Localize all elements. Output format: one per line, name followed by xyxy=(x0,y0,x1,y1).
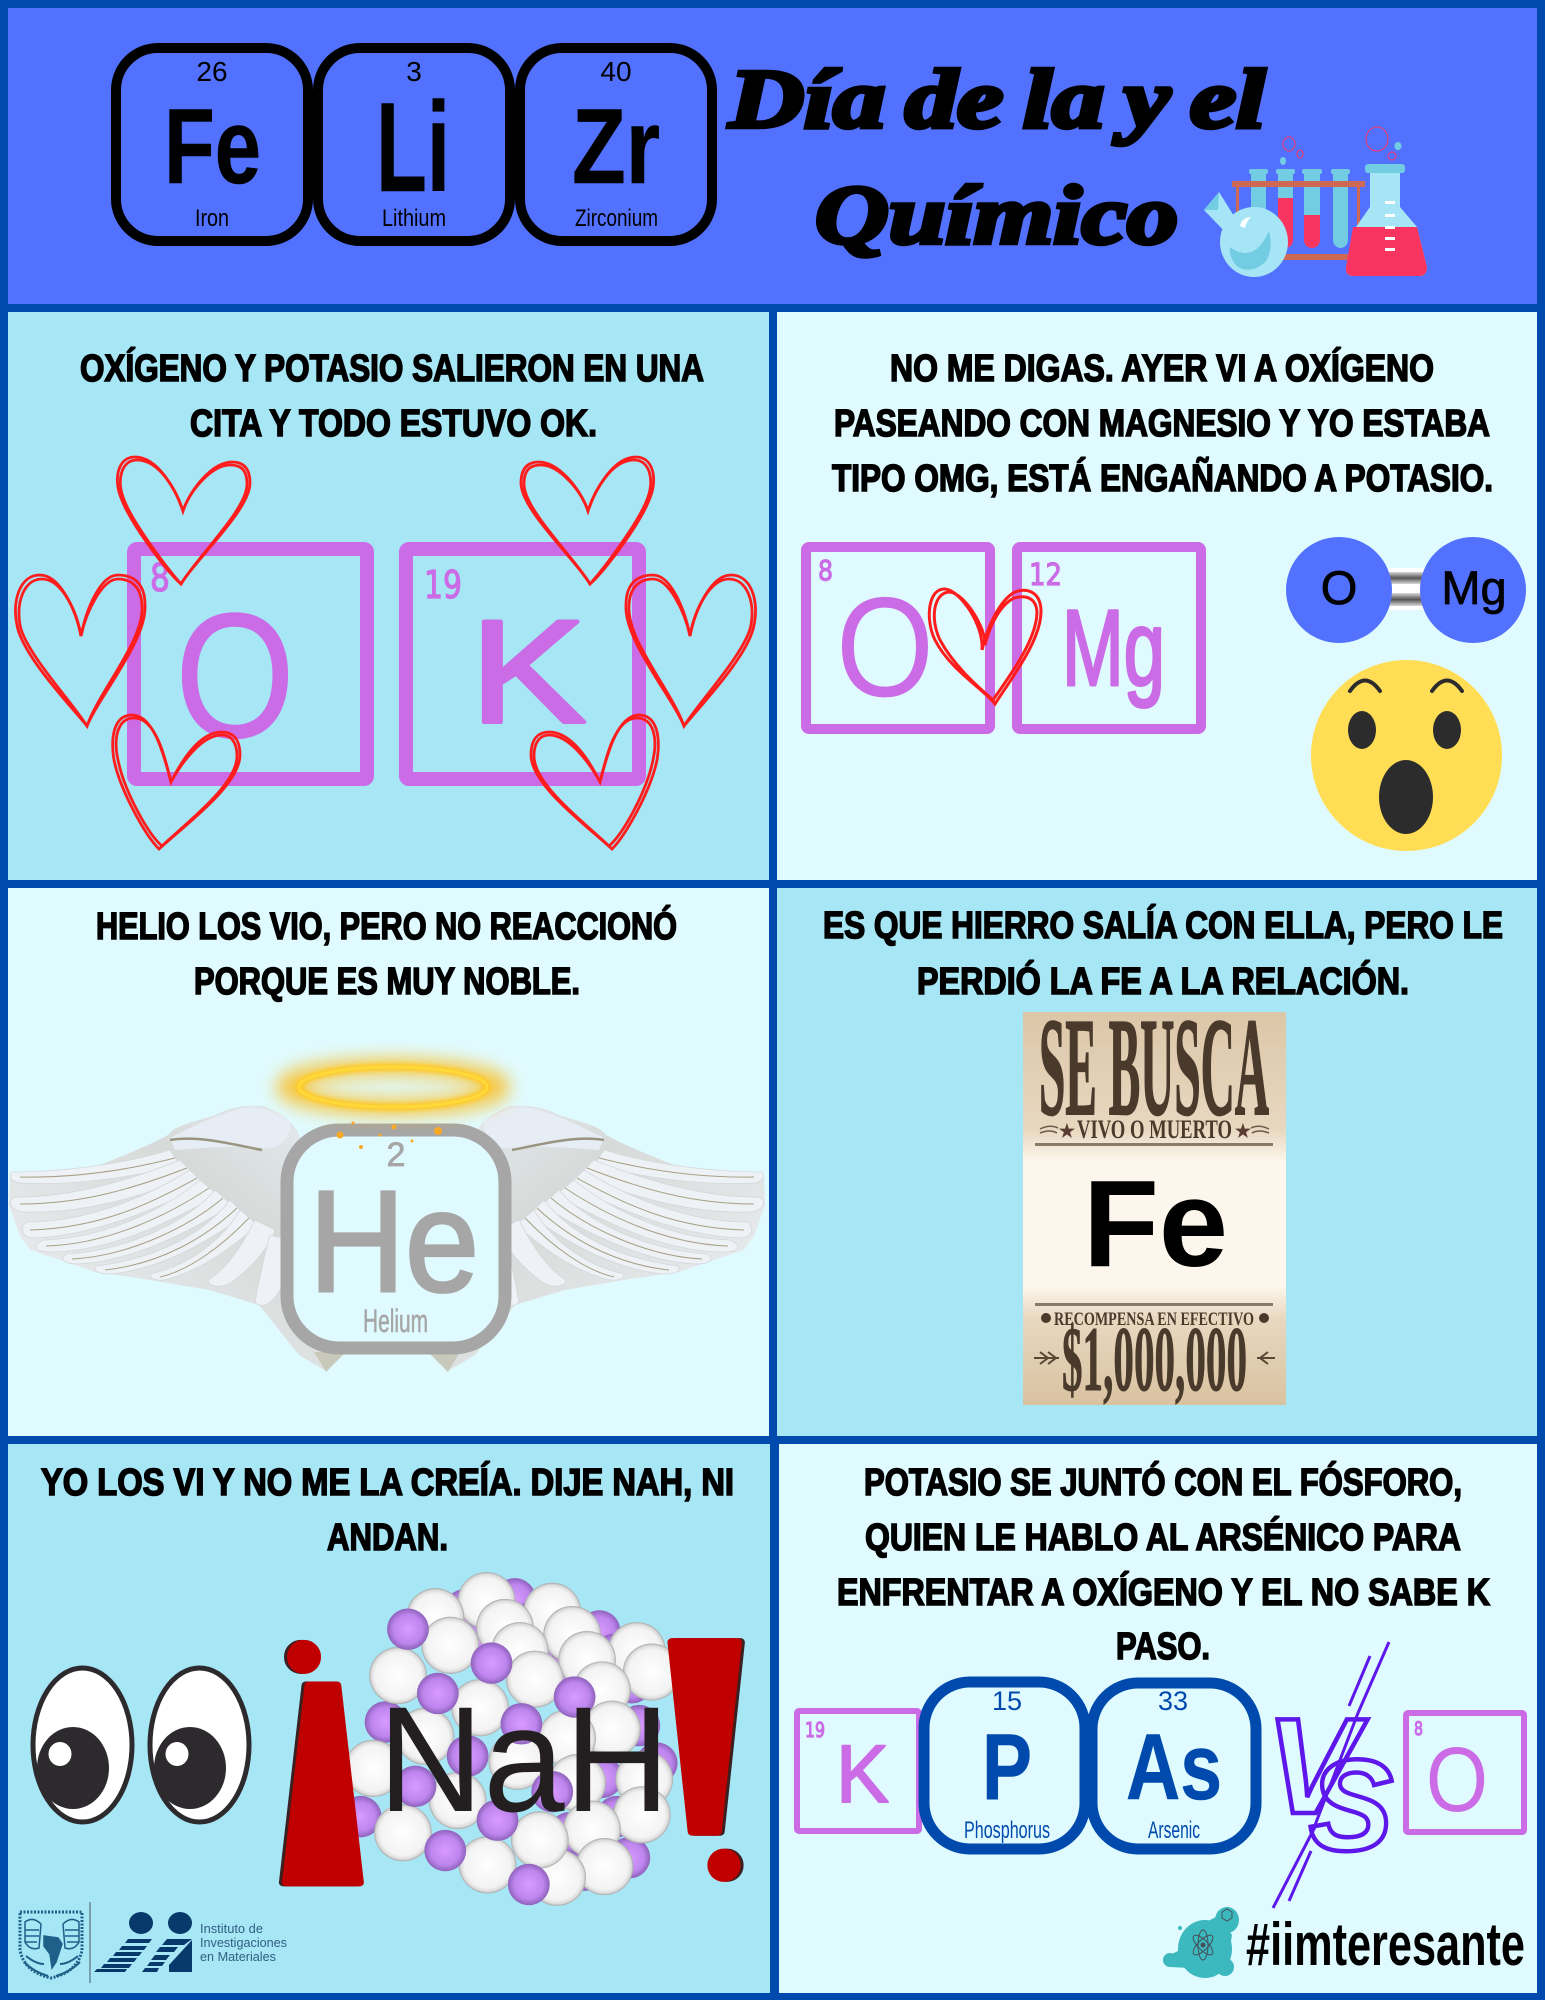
logo: UNAM shield xyxy=(20,1912,82,1978)
big word: ¡NaH! xyxy=(278,1638,745,1886)
element tile: Fe xyxy=(116,48,308,241)
icon: O-Mg molecule: Mg xyxy=(1441,561,1507,614)
element tile: P: Phosphorus xyxy=(964,1817,1050,1844)
icon: golden halo xyxy=(285,1067,501,1149)
element tile: Li: 3 xyxy=(406,56,422,87)
hearts: right group xyxy=(521,457,755,849)
wanted poster xyxy=(1023,990,1286,1410)
heading text: PASO. xyxy=(1116,1626,1210,1668)
title: Día de la y el xyxy=(728,53,1266,146)
element tile: He: He xyxy=(309,1161,479,1322)
element tile: O: 8 xyxy=(818,554,833,587)
element tile: K: K xyxy=(836,1729,889,1820)
element tile: Mg: 12 xyxy=(1029,558,1062,593)
versus mark: S xyxy=(1309,1732,1393,1878)
element tile: As: As xyxy=(1126,1714,1222,1819)
wanted poster: ★ xyxy=(1059,1121,1076,1141)
icon: surprised emoji xyxy=(1311,660,1502,851)
big word: ¡NaH!: ! xyxy=(630,1544,780,2000)
title: Químico xyxy=(815,169,1178,262)
heading text: NO ME DIGAS. AYER VI A OXÍGENO xyxy=(890,346,1434,390)
hearts: left group xyxy=(16,457,250,849)
panel: iron wanted xyxy=(777,888,1537,1436)
element tile: Mg: Mg xyxy=(1062,587,1165,708)
title xyxy=(728,53,1266,262)
big word: ¡NaH!: . xyxy=(701,1697,753,1924)
element tile: As: 33 xyxy=(1158,1686,1188,1716)
big word: ¡NaH!: NaH xyxy=(378,1675,670,1843)
icon: teal atom blob xyxy=(1163,1907,1239,1978)
heading text xyxy=(41,1460,734,1559)
element tile: O: O xyxy=(836,568,934,727)
element tile: O: 8 xyxy=(150,556,170,600)
icon: heart between tiles xyxy=(929,589,1041,704)
icon: angel wings left xyxy=(9,1106,346,1372)
element tile: K: 19 xyxy=(805,1718,825,1742)
logo: IIM institute: en Materiales xyxy=(200,1949,276,1964)
icon: O-Mg molecule xyxy=(1286,537,1526,643)
heading text xyxy=(832,346,1493,500)
element tile: Li: Li xyxy=(376,76,450,218)
big word: ¡NaH!: ! xyxy=(633,1544,783,2000)
logo: IIM institute: Instituto de xyxy=(200,1921,263,1936)
panel: potassium, phosphorus, arsenic vs oxygen xyxy=(779,1444,1537,1993)
versus mark xyxy=(1266,1642,1393,1908)
panel: oxygen and potassium date xyxy=(8,312,769,880)
element tile: He xyxy=(287,1130,505,1348)
element tile: He: 2 xyxy=(387,1136,405,1174)
icon: NaH crystal spheres xyxy=(340,1572,697,1906)
element tile: Fe: 26 xyxy=(196,56,228,87)
icon: cartoon eyes xyxy=(33,1668,249,1822)
big word: ¡NaH!: . xyxy=(278,1485,330,1717)
element tile: As: Arsenic xyxy=(1148,1817,1200,1844)
versus mark: V xyxy=(1266,1690,1368,1842)
element tile: Zr: Zirconium xyxy=(575,205,658,232)
wanted poster: ★ xyxy=(1235,1121,1252,1141)
panel: helium noble xyxy=(8,888,769,1436)
element tile: O xyxy=(806,547,990,729)
panel: oxygen with magnesium xyxy=(777,312,1537,880)
element tile: K: K xyxy=(470,590,586,753)
heading text xyxy=(823,903,1503,1003)
heading text: CITA Y TODO ESTUVO OK. xyxy=(190,403,597,445)
logo divider xyxy=(90,1902,91,1983)
element tile: He: Helium xyxy=(363,1303,428,1339)
element tile: O xyxy=(1406,1713,1524,1832)
heading text xyxy=(837,1460,1490,1668)
element tile: O: O xyxy=(175,576,295,775)
element tile: P: P xyxy=(982,1714,1032,1819)
element tile: Fe: Iron xyxy=(195,205,229,232)
heading text: PORQUE ES MUY NOBLE. xyxy=(194,961,580,1003)
element tile: K xyxy=(406,549,639,779)
wanted poster: Fe xyxy=(1083,1156,1228,1293)
big word: ¡NaH!: . xyxy=(275,1485,327,1717)
heading text xyxy=(96,904,677,1003)
element tile: Zr xyxy=(520,48,712,241)
heading text: YO LOS VI Y NO ME LA CREÍA. DIJE NAH, NI xyxy=(41,1460,734,1504)
element tile: K xyxy=(797,1711,919,1831)
heading text: PERDIÓ LA FE A LA RELACIÓN. xyxy=(917,959,1409,1003)
element tile: O xyxy=(134,549,367,779)
heading text xyxy=(80,346,704,445)
logo: IIM institute: Investigaciones xyxy=(200,1935,287,1950)
element tile: Mg xyxy=(1017,547,1201,729)
icon: O-Mg molecule: O xyxy=(1321,561,1357,614)
element tile: O: O xyxy=(1426,1729,1488,1831)
panel: sodium hydride nah xyxy=(8,1405,783,2000)
wanted poster: RECOMPENSA EN EFECTIVO xyxy=(1054,1309,1254,1330)
element tile: Fe: Fe xyxy=(164,86,261,206)
wanted poster: $1,000,000 xyxy=(1062,1308,1247,1410)
icon: angel wings right xyxy=(428,1106,765,1372)
icon: laboratory glassware xyxy=(1204,127,1427,277)
element tile: O: 8 xyxy=(1414,1718,1423,1740)
element tile: As xyxy=(1092,1683,1256,1849)
big word: ¡NaH!: ¡ xyxy=(239,1405,407,1891)
big word: ¡NaH!: ¡ xyxy=(236,1405,404,1891)
element tile: K: 19 xyxy=(424,563,462,607)
element tile: Li: Lithium xyxy=(382,205,446,232)
heading text: OXÍGENO Y POTASIO SALIERON EN UNA xyxy=(80,346,704,390)
element tile: P xyxy=(924,1682,1085,1849)
element tile: Li xyxy=(318,48,510,241)
heading text: HELIO LOS VIO, PERO NO REACCIONÓ xyxy=(96,904,677,948)
element tile: P: 15 xyxy=(992,1686,1022,1716)
panel: header xyxy=(8,8,1537,304)
logo: IIM institute xyxy=(94,1912,287,1972)
wanted poster: VIVO O MUERTO xyxy=(1077,1115,1232,1144)
big word: ¡NaH!: . xyxy=(698,1697,750,1924)
heading text: ANDAN. xyxy=(327,1517,448,1559)
element tile: Zr: 40 xyxy=(600,56,632,87)
element tile: Zr: Zr xyxy=(572,86,660,206)
